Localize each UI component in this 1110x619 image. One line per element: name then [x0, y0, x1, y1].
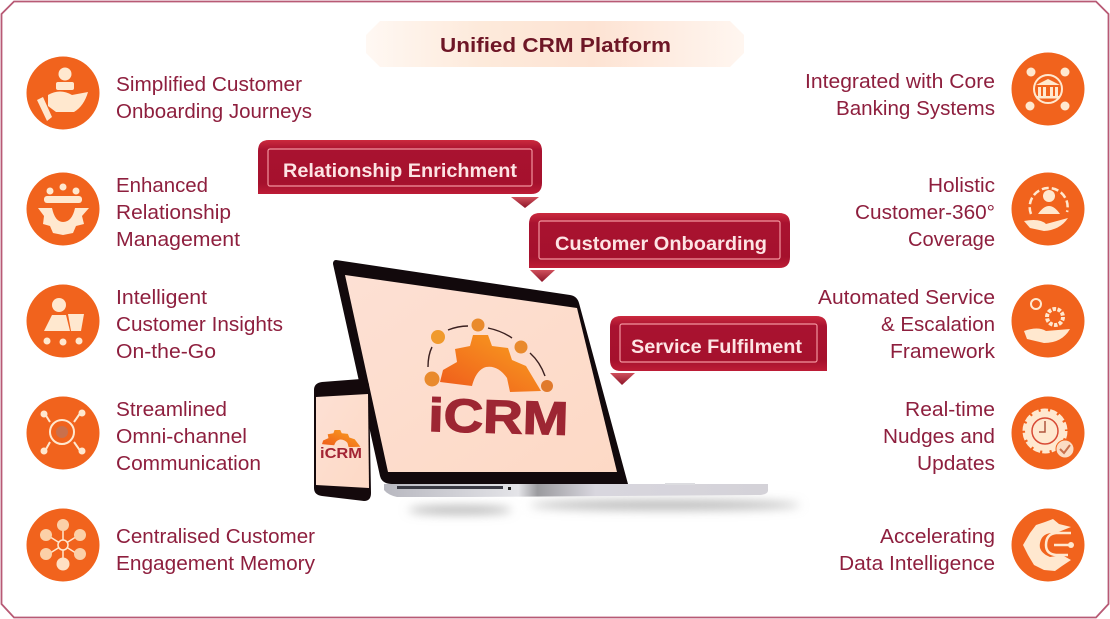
right feature: Integrated with Core Banking Systems: Banking Systems	[836, 98, 995, 120]
left feature: Intelligent Customer Insights On-the-Go: On-the-Go	[116, 341, 216, 363]
icon: gear with data lines	[1012, 508, 1084, 582]
left feature: Enhanced Relationship Management: Management	[116, 229, 240, 251]
laptop screen	[345, 275, 617, 472]
right feature: Holistic Customer-360 Coverage: Coverage	[908, 229, 995, 251]
left feature: Streamlined Omni-channel Communication	[26, 396, 261, 475]
icon: person with stars	[26, 284, 100, 358]
right feature: Accelerating Data Intelligence: Data Intelligence	[839, 553, 995, 575]
right feature: Holistic Customer-360 Coverage: Holistic	[928, 175, 995, 197]
laptop bezel	[333, 260, 628, 484]
icon: hand holding person	[26, 56, 100, 130]
iCRM logo on phone: iCRM	[320, 445, 362, 462]
phone screen	[316, 394, 369, 488]
left feature: Centralised Customer Engagement Memory: Engagement Memory	[116, 553, 315, 575]
left feature: Streamlined Omni-channel Communication: Omni-channel	[116, 426, 247, 448]
left feature: Streamlined Omni-channel Communication: Communication	[116, 453, 261, 475]
iCRM logo on laptop	[424, 318, 569, 445]
right feature: Automated Service and Escalation Framework: Framework	[890, 341, 996, 363]
right feature: Holistic Customer-360 Coverage	[855, 172, 1084, 251]
right feature: Holistic Customer-360 Coverage: Customer-360°	[855, 202, 995, 224]
left feature: Intelligent Customer Insights On-the-Go: Intelligent	[116, 287, 207, 309]
right feature: Integrated with Core Banking Systems	[805, 52, 1084, 126]
left feature: Streamlined Omni-channel Communication: Streamlined	[116, 399, 227, 421]
device illustration: laptop and phone	[314, 260, 800, 514]
callout: Relationship Enrichment: Relationship Enrichment	[283, 161, 518, 182]
iCRM logo on phone	[320, 430, 362, 462]
left feature: Centralised Customer Engagement Memory	[26, 508, 315, 582]
left feature: Intelligent Customer Insights On-the-Go: Customer Insights	[116, 314, 283, 336]
right feature: Automated Service and Escalation Framework: & Escalation	[881, 314, 995, 336]
right feature: Real-time Nudges and Updates: Real-time	[905, 399, 995, 421]
callout: Service Fulfilment: Service Fulfilment	[631, 337, 803, 358]
icon: gears over hand	[1012, 284, 1084, 358]
right feature: Accelerating Data Intelligence: Accelerating	[880, 526, 995, 548]
right feature: Real-time Nudges and Updates: Nudges and	[883, 426, 995, 448]
right feature: Accelerating Data Intelligence	[839, 508, 1084, 582]
right feature: Integrated with Core Banking Systems: Integrated with Core	[805, 71, 995, 93]
icon: person in 360 ring on hand	[1012, 172, 1084, 246]
callout: Service Fulfilment	[610, 316, 827, 385]
callout: Customer Onboarding	[529, 213, 790, 282]
left feature: Intelligent Customer Insights On-the-Go	[26, 284, 283, 363]
title pill: Unified CRM Platform	[366, 21, 744, 67]
laptop base	[384, 483, 768, 497]
title pill: Unified CRM Platform: Unified CRM Platform	[440, 35, 671, 57]
left feature: Enhanced Relationship Management: Enhanced	[116, 175, 208, 197]
icon: bank network	[1012, 52, 1084, 126]
left feature: Enhanced Relationship Management: Relationship	[116, 202, 231, 224]
icon: people network	[26, 508, 100, 582]
left feature: Simplified Customer Onboarding Journeys: Onboarding Journeys	[116, 101, 312, 123]
right feature: Automated Service and Escalation Framework: Automated Service	[818, 287, 995, 309]
icon: omni-channel hub	[26, 396, 100, 470]
laptop shadows	[408, 500, 800, 514]
left feature: Centralised Customer Engagement Memory: Centralised Customer	[116, 526, 315, 548]
left feature: Simplified Customer Onboarding Journeys	[26, 56, 312, 130]
callout: Relationship Enrichment	[258, 140, 542, 208]
right feature: Real-time Nudges and Updates: Updates	[917, 453, 995, 475]
right feature: Real-time Nudges and Updates	[883, 396, 1084, 475]
iCRM logo on laptop: iCRM	[428, 388, 569, 445]
icon: clock gear with check	[1012, 396, 1084, 470]
right feature: Automated Service and Escalation Framework	[818, 284, 1084, 363]
icon: team on gear	[26, 172, 100, 246]
callout: Customer Onboarding: Customer Onboarding	[555, 234, 767, 255]
phone body	[314, 379, 371, 501]
left feature: Simplified Customer Onboarding Journeys: Simplified Customer	[116, 74, 302, 96]
left feature: Enhanced Relationship Management	[26, 172, 240, 251]
